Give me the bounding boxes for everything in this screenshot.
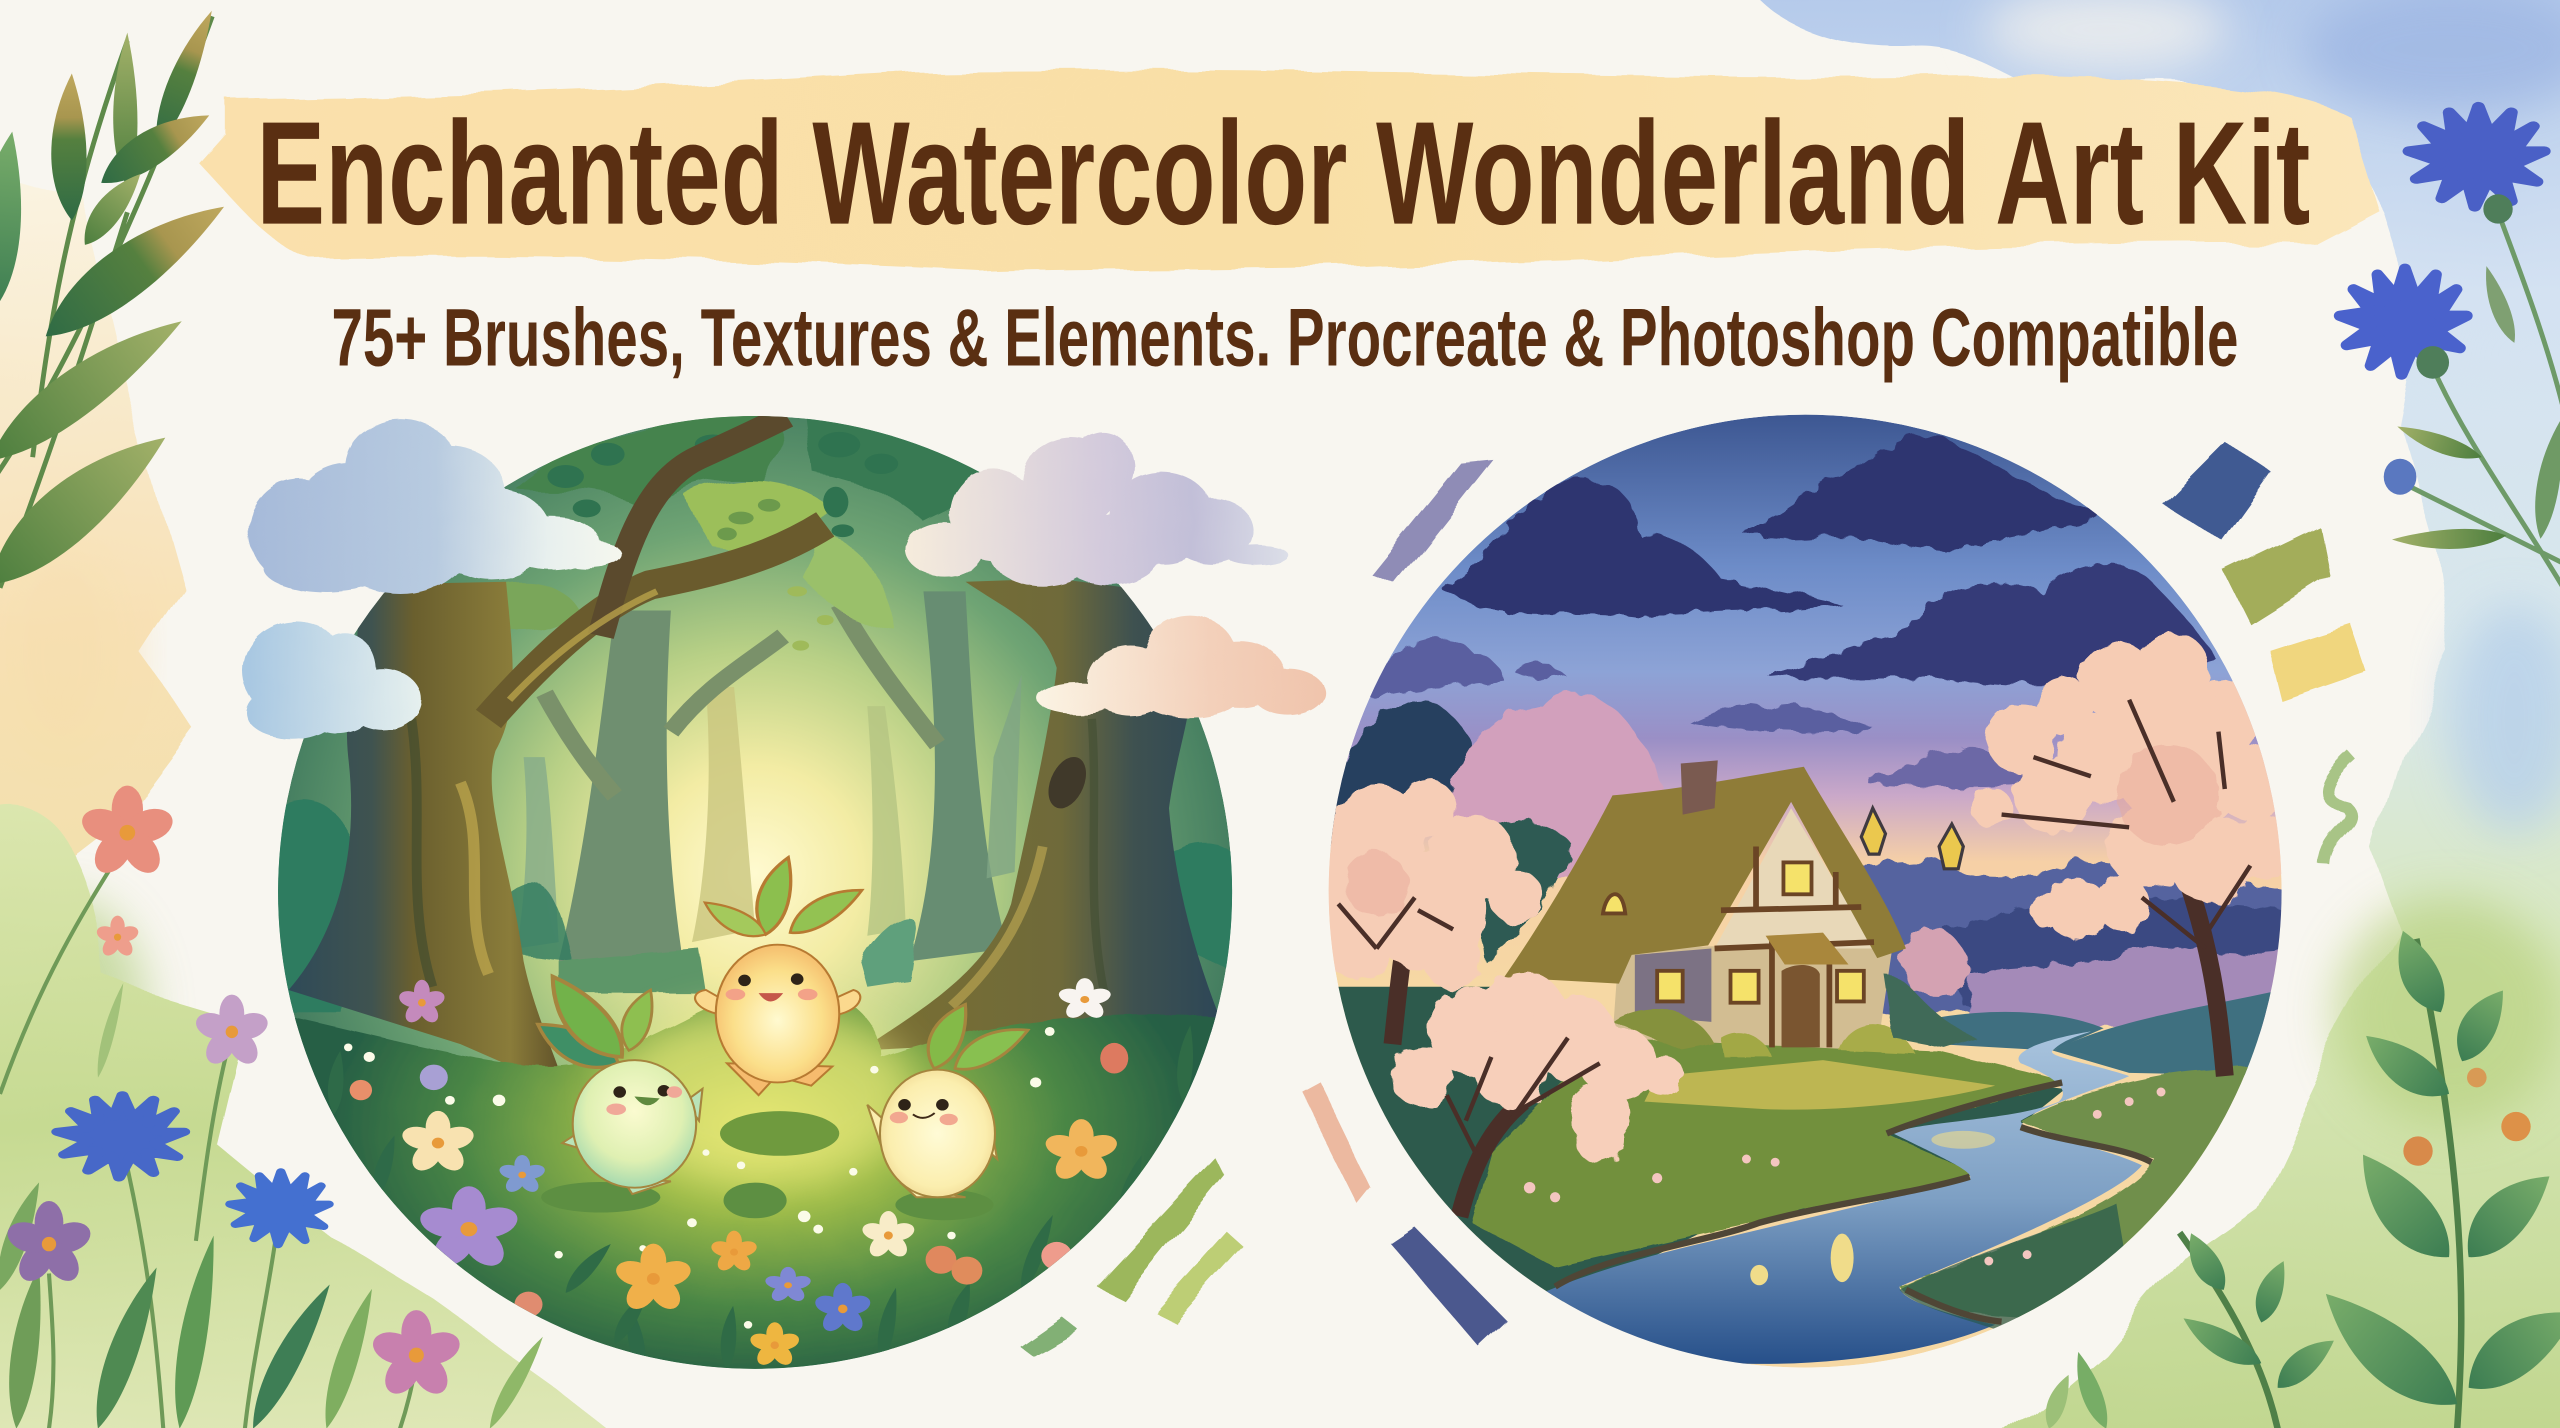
main grass island bbox=[1472, 1038, 2065, 1267]
cloud: cream and lilac bbox=[906, 432, 1288, 586]
storm clouds bbox=[1370, 435, 2218, 787]
left oak tree bbox=[289, 416, 825, 1090]
house roof bbox=[1504, 760, 1963, 1051]
forest light background bbox=[278, 416, 1232, 1369]
brush swatches: green near left circle bbox=[1019, 1159, 1244, 1355]
foliage: top right cornflowers bbox=[2340, 107, 2560, 588]
right bank bbox=[1900, 1063, 2282, 1318]
cloud: peach bbox=[1037, 616, 1325, 718]
soft glow bbox=[608, 1006, 916, 1184]
cherry blossoms: left tree bbox=[1313, 779, 1544, 990]
foliage: bottom left wildflowers bbox=[0, 786, 548, 1428]
illustration: cottage at dusk circle bbox=[1313, 415, 2295, 1368]
glowing path bbox=[1644, 1060, 1995, 1110]
distant trees and mountains bbox=[1326, 692, 2295, 1031]
brush swatches: navy, olive, yellow and squiggle bbox=[2162, 441, 2367, 865]
riverbank shadow bbox=[1555, 1082, 2151, 1322]
meadow flowers bbox=[350, 978, 1128, 1368]
river bbox=[1542, 1031, 2142, 1364]
cherry tree trunks bbox=[1392, 859, 2225, 1216]
watercolor wash: left green bbox=[0, 803, 637, 1428]
meadow grass and dots bbox=[325, 1025, 1197, 1371]
meadow blossoms bbox=[1524, 1088, 2165, 1265]
watercolor wash: left yellow bbox=[0, 163, 199, 931]
far fields bbox=[1931, 1012, 2104, 1051]
dusk sky bbox=[1329, 415, 2282, 1368]
right oak tree bbox=[860, 579, 1225, 1051]
title brush stroke bbox=[199, 70, 2380, 271]
foliage: bottom right sprigs bbox=[2039, 924, 2560, 1428]
foliage: top left sprig bbox=[0, 5, 236, 603]
bushes by the house bbox=[1613, 974, 1976, 1057]
cherry tree branches bbox=[1338, 700, 2250, 1153]
sprite: left bbox=[528, 967, 702, 1194]
sprite: right bbox=[867, 998, 1034, 1197]
illustration: enchanted forest circle bbox=[243, 406, 1325, 1382]
river reflections bbox=[1750, 1131, 1995, 1285]
watercolor wash: right side bbox=[1739, 0, 2560, 1428]
sprite: centre bbox=[695, 853, 868, 1095]
cherry blossoms: front tree bbox=[1391, 971, 1684, 1164]
canopy leaves bbox=[547, 432, 898, 651]
cloud: blue upper left bbox=[249, 419, 622, 595]
brush swatches: lilac, peach and navy bbox=[1301, 460, 1505, 1345]
background trunks bbox=[517, 591, 1022, 974]
canopy bbox=[503, 406, 1001, 632]
distant bushes bbox=[271, 801, 1239, 1012]
wash highlights bbox=[0, 0, 2560, 1127]
cherry blossoms: right tree bbox=[1972, 633, 2295, 941]
dark foreground ground bbox=[1326, 987, 2065, 1306]
meadow ground bbox=[294, 1008, 1216, 1369]
cloud: blue lower left bbox=[243, 621, 422, 739]
